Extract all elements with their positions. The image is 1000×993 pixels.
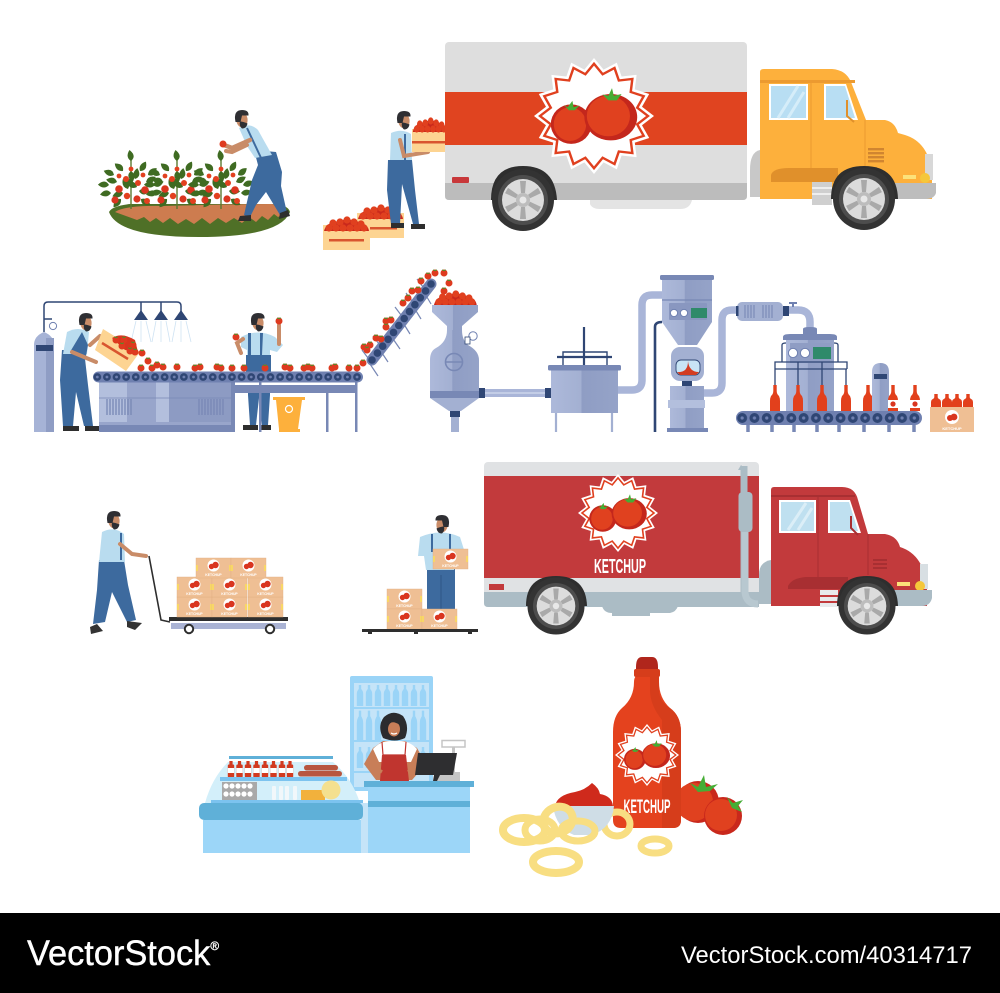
labelled bottles [888, 385, 920, 411]
inclined conveyor [362, 279, 435, 376]
rear wheel [491, 166, 557, 231]
cargo box [445, 42, 747, 200]
tomato logo badge [534, 58, 654, 174]
footer url: VectorStock.com/40314717 [681, 942, 972, 969]
held box [433, 549, 468, 569]
ketchup wordmark: KETCHUP [594, 556, 646, 578]
exhaust stack [738, 465, 758, 604]
bottle [613, 657, 681, 828]
pallet [362, 629, 478, 634]
cash register [415, 740, 465, 781]
worker figure [387, 111, 428, 229]
farmer picking tomatoes in a garden [98, 110, 290, 237]
stacked boxes [387, 589, 457, 629]
display case base [199, 803, 368, 853]
tomato plants [98, 150, 254, 209]
heat exchanger [736, 302, 810, 332]
pipe to cooking tank [479, 388, 551, 398]
spray pipe [44, 302, 181, 332]
worker pushing pallet cart [90, 511, 288, 634]
front wheel [837, 576, 898, 635]
chassis [602, 606, 678, 616]
tomatoes on incline [360, 270, 452, 366]
checkout counter [364, 781, 474, 853]
ketchup ring behind bowl [604, 812, 630, 836]
delivery truck: tomatoes [445, 42, 936, 231]
cooking tank with stirrer [548, 327, 621, 432]
worker figure [90, 511, 146, 634]
rear wheel [526, 576, 587, 635]
sorting worker [232, 313, 283, 430]
shop assistant [364, 713, 426, 781]
cargo box [484, 462, 759, 607]
main conveyor [93, 372, 363, 382]
spray lamps [131, 310, 191, 342]
pipe to heat exchanger [704, 310, 737, 393]
pipe up to hopper [618, 295, 662, 390]
processing hopper [660, 275, 714, 432]
bottle label [615, 724, 679, 786]
milk bottles [272, 786, 297, 800]
washing machine body [99, 382, 235, 432]
bottling conveyor [736, 411, 922, 432]
shelf contents [211, 756, 363, 804]
footer logo: ® [210, 939, 219, 953]
garden ground [109, 204, 290, 237]
row 2: washing and sorting line [34, 270, 974, 432]
filling hopper with tomatoes [430, 290, 479, 432]
packed ketchup box: KETCHUP [942, 426, 962, 431]
packed ketchup box [930, 394, 974, 432]
worker emptying crate [60, 313, 100, 431]
tomatoes [675, 775, 743, 835]
ketchup bottle with snacks [503, 657, 743, 873]
chassis under box [590, 200, 692, 209]
grocery store counter [199, 676, 474, 853]
footer logo: VectorStock [27, 934, 214, 973]
bottles being filled [770, 385, 873, 411]
gas cylinder with gauge [34, 322, 57, 432]
front wheel [831, 166, 898, 230]
display case glass [205, 762, 360, 803]
worker loading crates [323, 111, 448, 250]
worker figure [418, 515, 466, 609]
tipping crate with tomatoes [95, 329, 140, 371]
footer bar [0, 913, 1000, 993]
cab [760, 69, 936, 205]
labelling machine [872, 363, 889, 411]
drinks fridge [350, 676, 433, 791]
ketchup wordmark: KETCHUP [624, 797, 671, 818]
tomato logo badge [578, 474, 658, 552]
table frame [235, 382, 358, 432]
ketchup boxes on cart [177, 558, 283, 617]
side pipe [655, 322, 662, 432]
onion rings [503, 802, 669, 873]
delivery truck: ketchup [484, 462, 932, 635]
filling machine [775, 327, 847, 411]
sausages [298, 765, 342, 776]
held crate [412, 117, 448, 152]
cab connector [750, 150, 760, 197]
worker stacking boxes [362, 515, 478, 634]
recycling bin [273, 397, 305, 432]
eggs [222, 782, 257, 800]
cab [771, 487, 932, 607]
farmer figure [220, 110, 290, 221]
bowl of sauce [553, 783, 614, 835]
tomatoes on belt [138, 350, 360, 372]
cheese [301, 780, 340, 800]
cab connector [759, 560, 771, 604]
ground crates [323, 204, 404, 250]
cart [149, 556, 288, 633]
